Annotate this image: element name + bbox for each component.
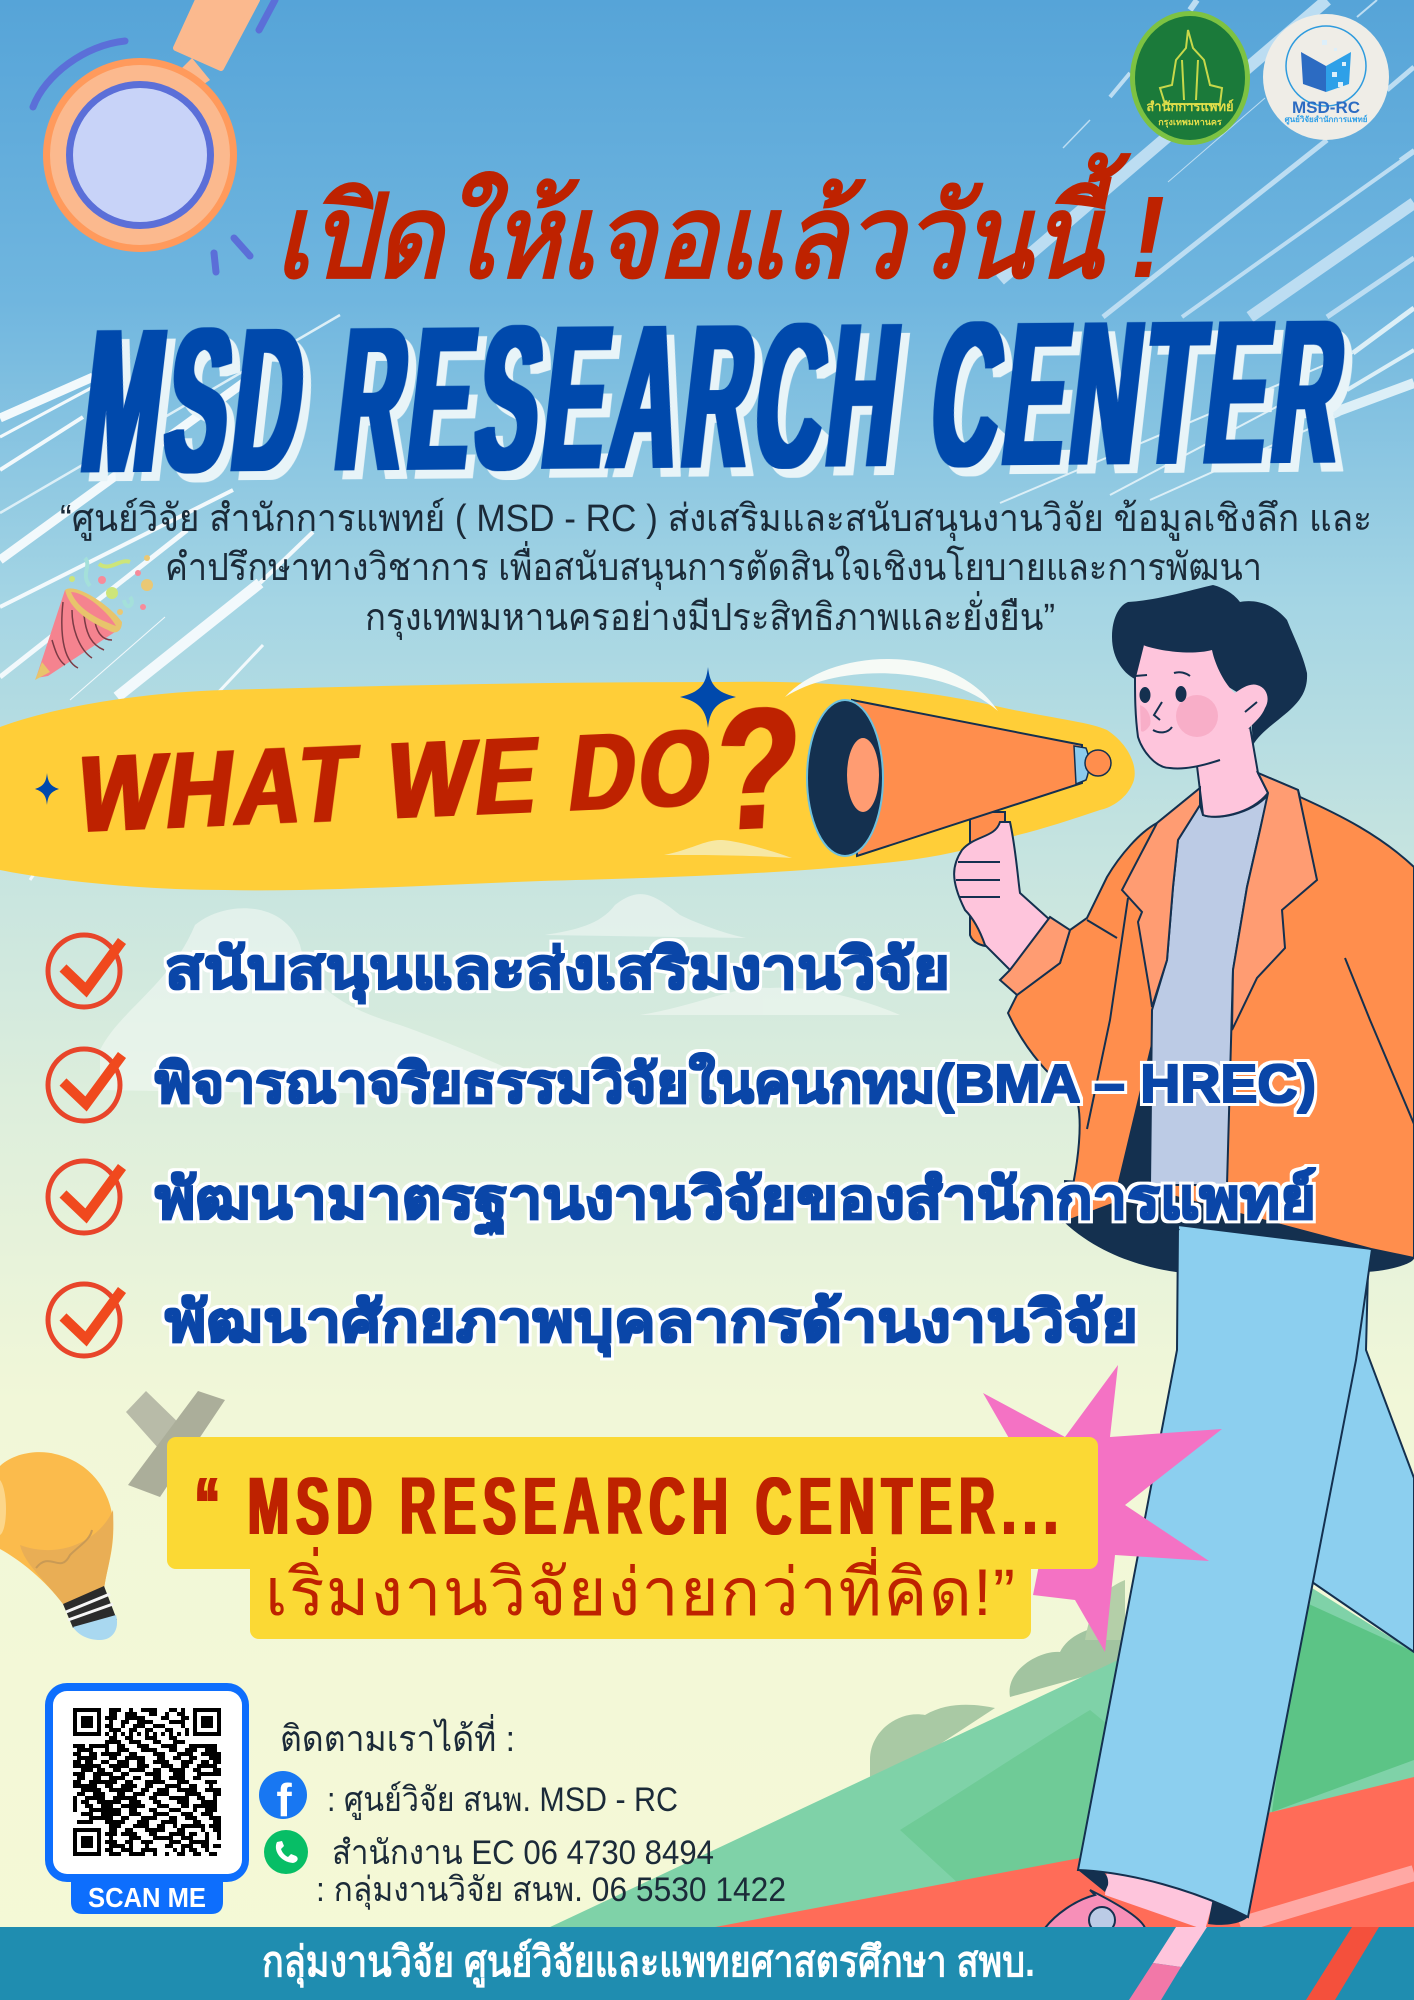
- logo: MSD-RC: [1263, 14, 1389, 140]
- headline thai: เปิดให้เจอแล้ววันนี้ !: [275, 152, 1165, 302]
- face: [1135, 645, 1268, 768]
- intro paragraph: คำปรึกษาทางวิชาการ เพื่อสนับสนุนการตัดสินใจเชิงนโยบายและการพัฒนา: [165, 541, 1262, 590]
- sleeve cuff: [1000, 917, 1070, 995]
- shirt: [1150, 795, 1268, 1185]
- jacket lining: [1064, 1180, 1414, 1275]
- illustration: hillside and track: [548, 1580, 1414, 1930]
- trousers: [1078, 1225, 1372, 1917]
- clouds: [100, 894, 900, 1093]
- QR card: SCAN ME: [88, 1882, 206, 1913]
- logo: medical department seal: สำนักการแพทย์: [1146, 99, 1234, 114]
- list: what we do: [48, 935, 1316, 1357]
- banner heading: ?: [710, 670, 805, 867]
- logo: medical department seal: กรุงเทพมหานคร: [1158, 117, 1222, 128]
- illustration: magnifying glass: [33, 0, 275, 272]
- phone numbers: [316, 1834, 786, 1910]
- item 1: สนับสนุนและส่งเสริมงานวิจัย: [165, 937, 950, 1004]
- sock: [1105, 1868, 1215, 1930]
- item 4: พัฒนาศักยภาพบุคลากรด้านงานวิจัย: [165, 1290, 1138, 1357]
- icon: party popper: [35, 555, 153, 680]
- logo: MSD-RC: ศูนย์วิจัยสำนักการแพทย์: [1285, 114, 1368, 125]
- footer band: กลุ่มงานวิจัย ศูนย์วิจัยและแพทยศาสตรศึกษา สพบ.: [262, 1938, 1035, 1988]
- megaphone: [807, 700, 1111, 856]
- icon: light bulb: [0, 1452, 117, 1640]
- intro paragraph: กรุงเทพมหานครอย่างมีประสิทธิภาพและยั่งยืน”: [365, 591, 1055, 640]
- phone numbers: สำนักงาน EC 06 4730 8494: [332, 1834, 714, 1872]
- facebook label: : ศูนย์วิจัย สนพ. MSD - RC: [327, 1781, 678, 1820]
- icons: sparkles: [35, 667, 736, 805]
- footer band: [0, 1927, 1414, 2000]
- starburst: [983, 1365, 1222, 1652]
- shoe: [1045, 1890, 1145, 1928]
- item 4: [48, 1284, 1138, 1357]
- tagline box: เริ่มงานวิจัยง่ายกว่าที่คิด!”: [265, 1547, 1015, 1629]
- logo: MSD-RC: MSD-RC: [1292, 98, 1360, 117]
- QR code: [73, 1710, 221, 1854]
- back leg: [1312, 1260, 1414, 1652]
- banner: yellow blob: [0, 682, 1135, 890]
- left lapel: [1122, 788, 1200, 1007]
- hair: [1112, 585, 1307, 745]
- icon: tape cross: [126, 1391, 225, 1497]
- swoosh above megaphone: [785, 659, 998, 711]
- neck: [1197, 727, 1268, 817]
- tagline box: [167, 1437, 1098, 1639]
- QR card: [45, 1683, 249, 1914]
- illustration: walking person: [1008, 585, 1414, 1933]
- item 3: พัฒนามาตรฐานงานวิจัยของสำนักการแพทย์: [155, 1167, 1316, 1235]
- item 1: [48, 935, 950, 1007]
- jacket: [1008, 773, 1414, 1258]
- banner heading: WHAT WE DO: [71, 706, 722, 856]
- icon: phone: [264, 1830, 308, 1874]
- follow heading: ติดตามเราได้ที่ :: [280, 1714, 515, 1759]
- icon: facebook: f: [276, 1774, 292, 1826]
- right lapel: [1232, 773, 1317, 1030]
- cloud on banner: [664, 840, 792, 858]
- hand holding handle: [954, 812, 1050, 970]
- facial features: [1135, 645, 1257, 768]
- phone numbers: : กลุ่มงานวิจัย สนพ. 06 5530 1422: [316, 1871, 786, 1910]
- intro paragraph: [60, 497, 1372, 640]
- logo: medical department seal: [1130, 11, 1250, 145]
- icon: facebook: [259, 1771, 307, 1826]
- item 2: พิจารณาจริยธรรมวิจัยในคนกทม(BMA – HREC): [155, 1052, 1316, 1114]
